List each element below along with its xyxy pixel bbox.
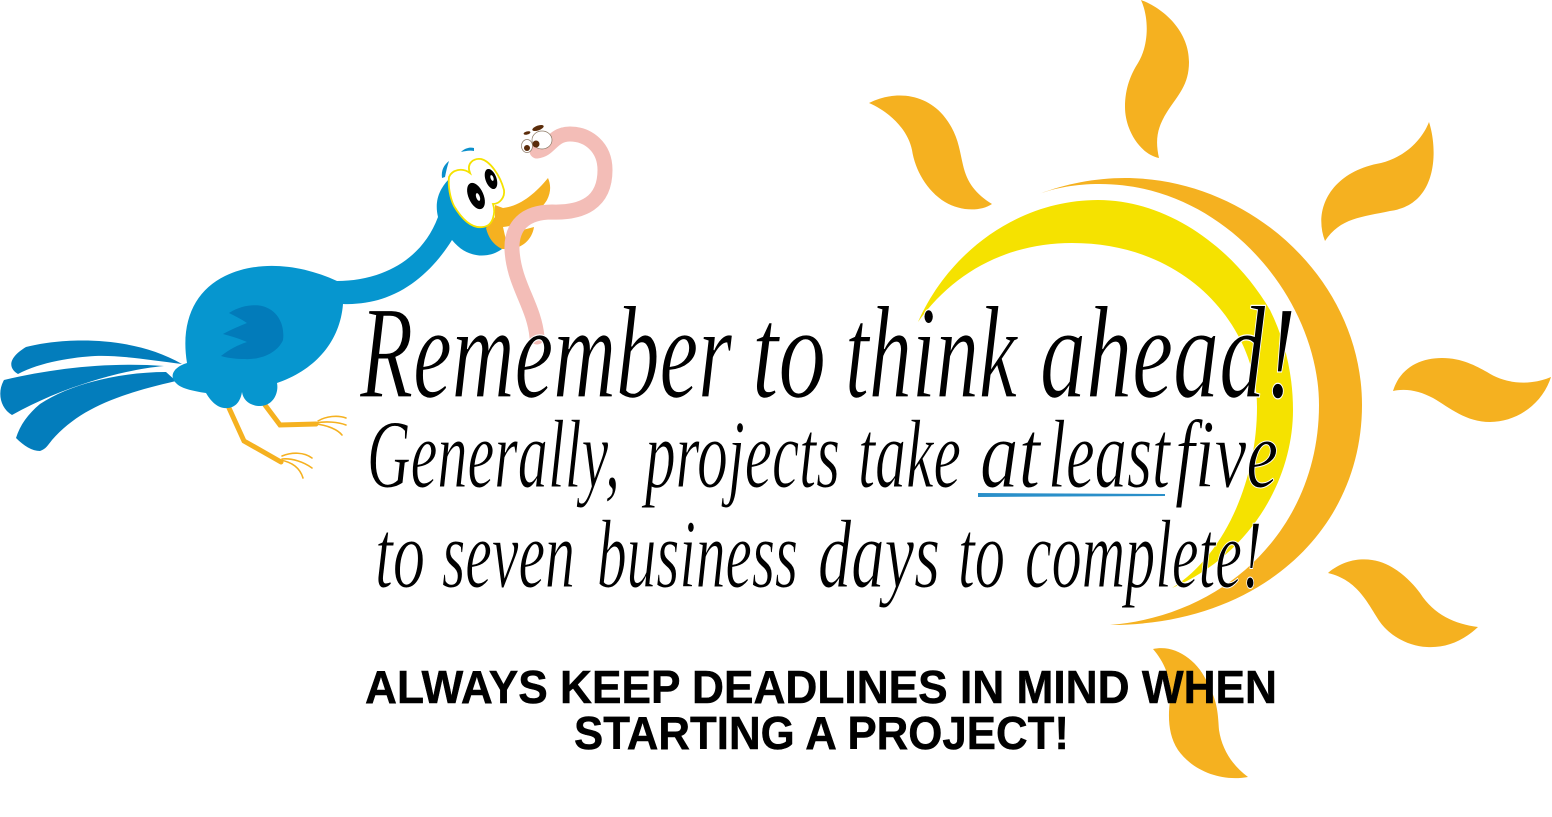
- subtitle: line two: to: [958, 501, 1005, 609]
- closing message: STARTING A PROJECT!: [574, 707, 1069, 759]
- worm body: [512, 134, 605, 337]
- sun ray: top left: [869, 96, 992, 209]
- subtitle: line one: projects: [641, 401, 840, 509]
- subtitle: line two: to: [375, 501, 425, 609]
- subtitle: line one: five: [1175, 401, 1278, 509]
- subtitle: line two: business: [597, 501, 798, 609]
- worm pupils and brows: [523, 124, 544, 151]
- bird wing: [221, 305, 283, 359]
- sun ray: bottom: [1153, 648, 1248, 778]
- subtitle: line one: [367, 401, 1278, 509]
- subtitle: line one: Generally,: [367, 401, 620, 509]
- bird eye highlights: [475, 175, 494, 201]
- sun ray: right: [1393, 358, 1551, 422]
- bird crest marks: [442, 148, 474, 178]
- title: [359, 279, 1296, 426]
- subtitle: line two: seven: [442, 501, 575, 609]
- bird tail feathers: [0, 340, 182, 451]
- sun ray: lower right: [1328, 559, 1478, 647]
- sun ray: top right: [1321, 122, 1434, 241]
- bird legs: [229, 405, 346, 478]
- bird eye whites: [449, 159, 504, 227]
- sun crescent: inner yellow: [918, 200, 1293, 588]
- bird body and neck: [173, 178, 502, 408]
- sun ray: top: [1125, 0, 1189, 158]
- title: ahead!: [1040, 279, 1296, 426]
- subtitle: line two: complete!: [1025, 501, 1262, 609]
- title: Remember: [359, 279, 732, 426]
- closing message: [365, 661, 1277, 759]
- title: to: [752, 279, 826, 426]
- icon: bird: [0, 148, 550, 478]
- icon: sun: [869, 0, 1551, 778]
- icon: worm: [512, 124, 605, 337]
- subtitle: line one: take: [858, 401, 961, 509]
- bird pupil: left: [463, 180, 489, 212]
- title: think: [845, 279, 1019, 426]
- subtitle: line two: [375, 501, 1262, 609]
- bird pupil: right: [482, 167, 500, 191]
- subtitle: line one: at: [980, 401, 1042, 509]
- subtitle: line one: least: [1048, 401, 1172, 509]
- subtitle: line two: days: [818, 501, 940, 609]
- bird lower beak: [510, 227, 534, 249]
- sun crescent: outer orange: [1039, 178, 1362, 625]
- worm eyes: [522, 131, 552, 152]
- closing message: ALWAYS KEEP DEADLINES IN MIND WHEN: [365, 661, 1277, 713]
- bird upper beak: [486, 178, 550, 249]
- underline: at least: [978, 493, 1165, 497]
